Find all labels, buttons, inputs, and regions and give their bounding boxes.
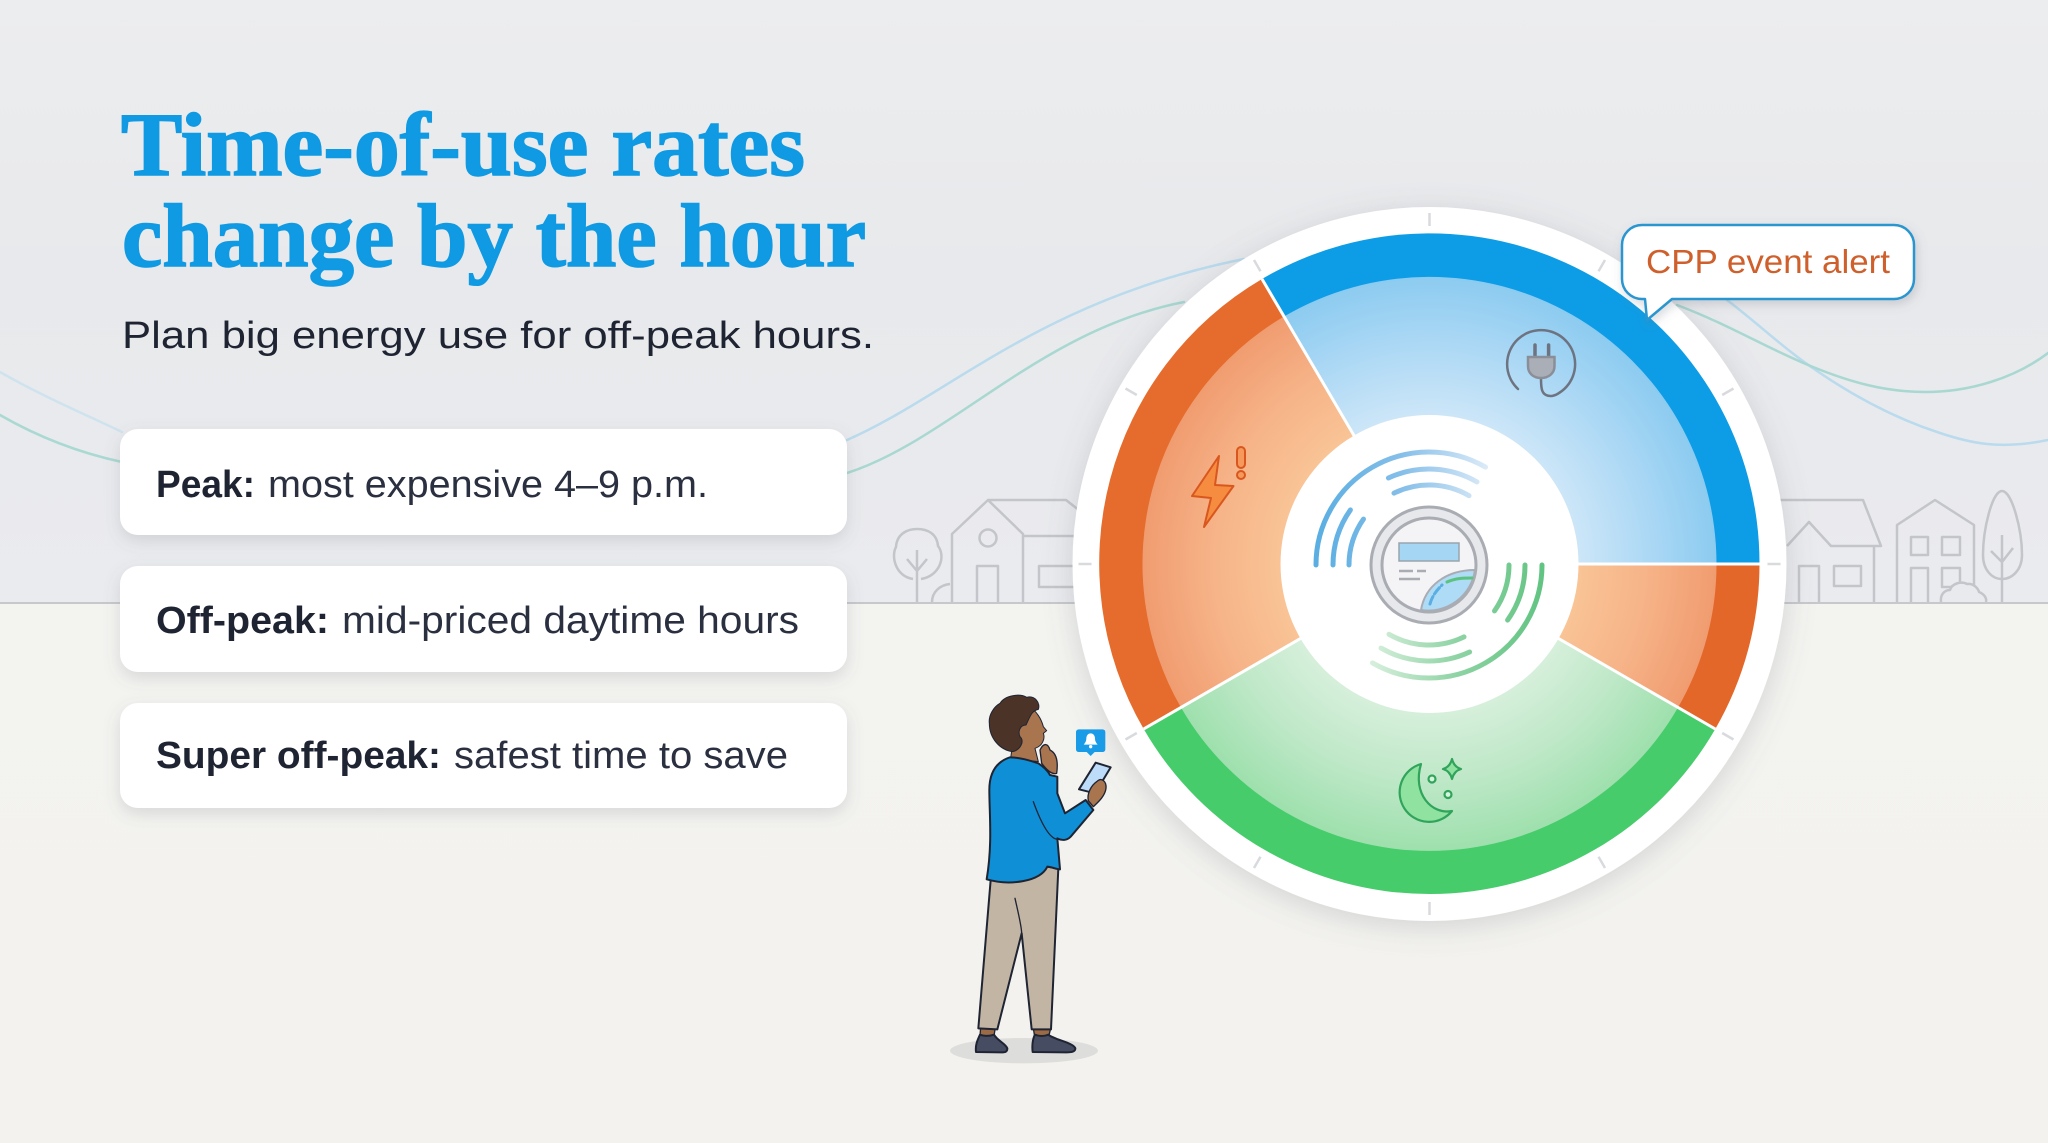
- card: super off-peak: Super off-peak:: [156, 735, 441, 777]
- icon: moon and stars: [1400, 759, 1461, 822]
- segment: peak orange left: [1099, 279, 1430, 729]
- title: [121, 96, 866, 286]
- hand holding phone: [1088, 780, 1106, 807]
- hand at chin: [1040, 745, 1057, 774]
- neighbourhood left: tree and house: [894, 500, 1080, 602]
- card: super off-peak: safest time to save: [454, 735, 788, 777]
- ground shadow: [950, 1038, 1098, 1063]
- title: Time-of-use rates: [121, 96, 805, 195]
- icon: plug: [1507, 330, 1575, 396]
- person checking phone: [950, 695, 1111, 1063]
- trousers: [978, 867, 1058, 1029]
- hair: [989, 695, 1039, 752]
- centre hub: [1280, 415, 1578, 713]
- segment: off-peak blue: [1262, 233, 1760, 564]
- card: super off-peak: [120, 703, 847, 808]
- card: off-peak: Off-peak:: [156, 600, 329, 642]
- title: change by the hour: [122, 187, 866, 286]
- ankles: [980, 1027, 1051, 1037]
- hub signal arcs: blue: [1316, 452, 1486, 565]
- notification bell: [1076, 729, 1105, 756]
- card: peak: most expensive 4–9 p.m.: [268, 464, 708, 506]
- icon: lightning alert: [1192, 447, 1245, 527]
- hour ticks: [1078, 213, 1780, 915]
- segment: peak orange right: [1430, 564, 1760, 729]
- price waves: [0, 259, 2048, 473]
- neck and face: [1011, 707, 1047, 762]
- segment: super off-peak green: [1144, 564, 1715, 894]
- subtitle: Plan big energy use for off-peak hours.: [122, 315, 874, 357]
- smart meter: [1371, 507, 1487, 623]
- card: off-peak: mid-priced daytime hours: [342, 600, 799, 642]
- background: sky: [0, 0, 2048, 603]
- dial base: [1072, 207, 1786, 921]
- phone: [1079, 763, 1111, 793]
- neighbourhood right: houses and tree: [1780, 491, 2022, 602]
- callout: CPP event alert: CPP event alert: [1646, 243, 1890, 280]
- shirt: [987, 757, 1093, 882]
- card: peak: [120, 429, 847, 535]
- shoes: [976, 1035, 1075, 1052]
- hub signal arcs: green: [1372, 565, 1542, 678]
- rate dial: [1072, 207, 1786, 921]
- background: ground: [0, 603, 2048, 1143]
- card: peak: Peak:: [156, 464, 255, 506]
- card: off-peak: [120, 566, 847, 672]
- callout: CPP event alert: [1622, 225, 1914, 320]
